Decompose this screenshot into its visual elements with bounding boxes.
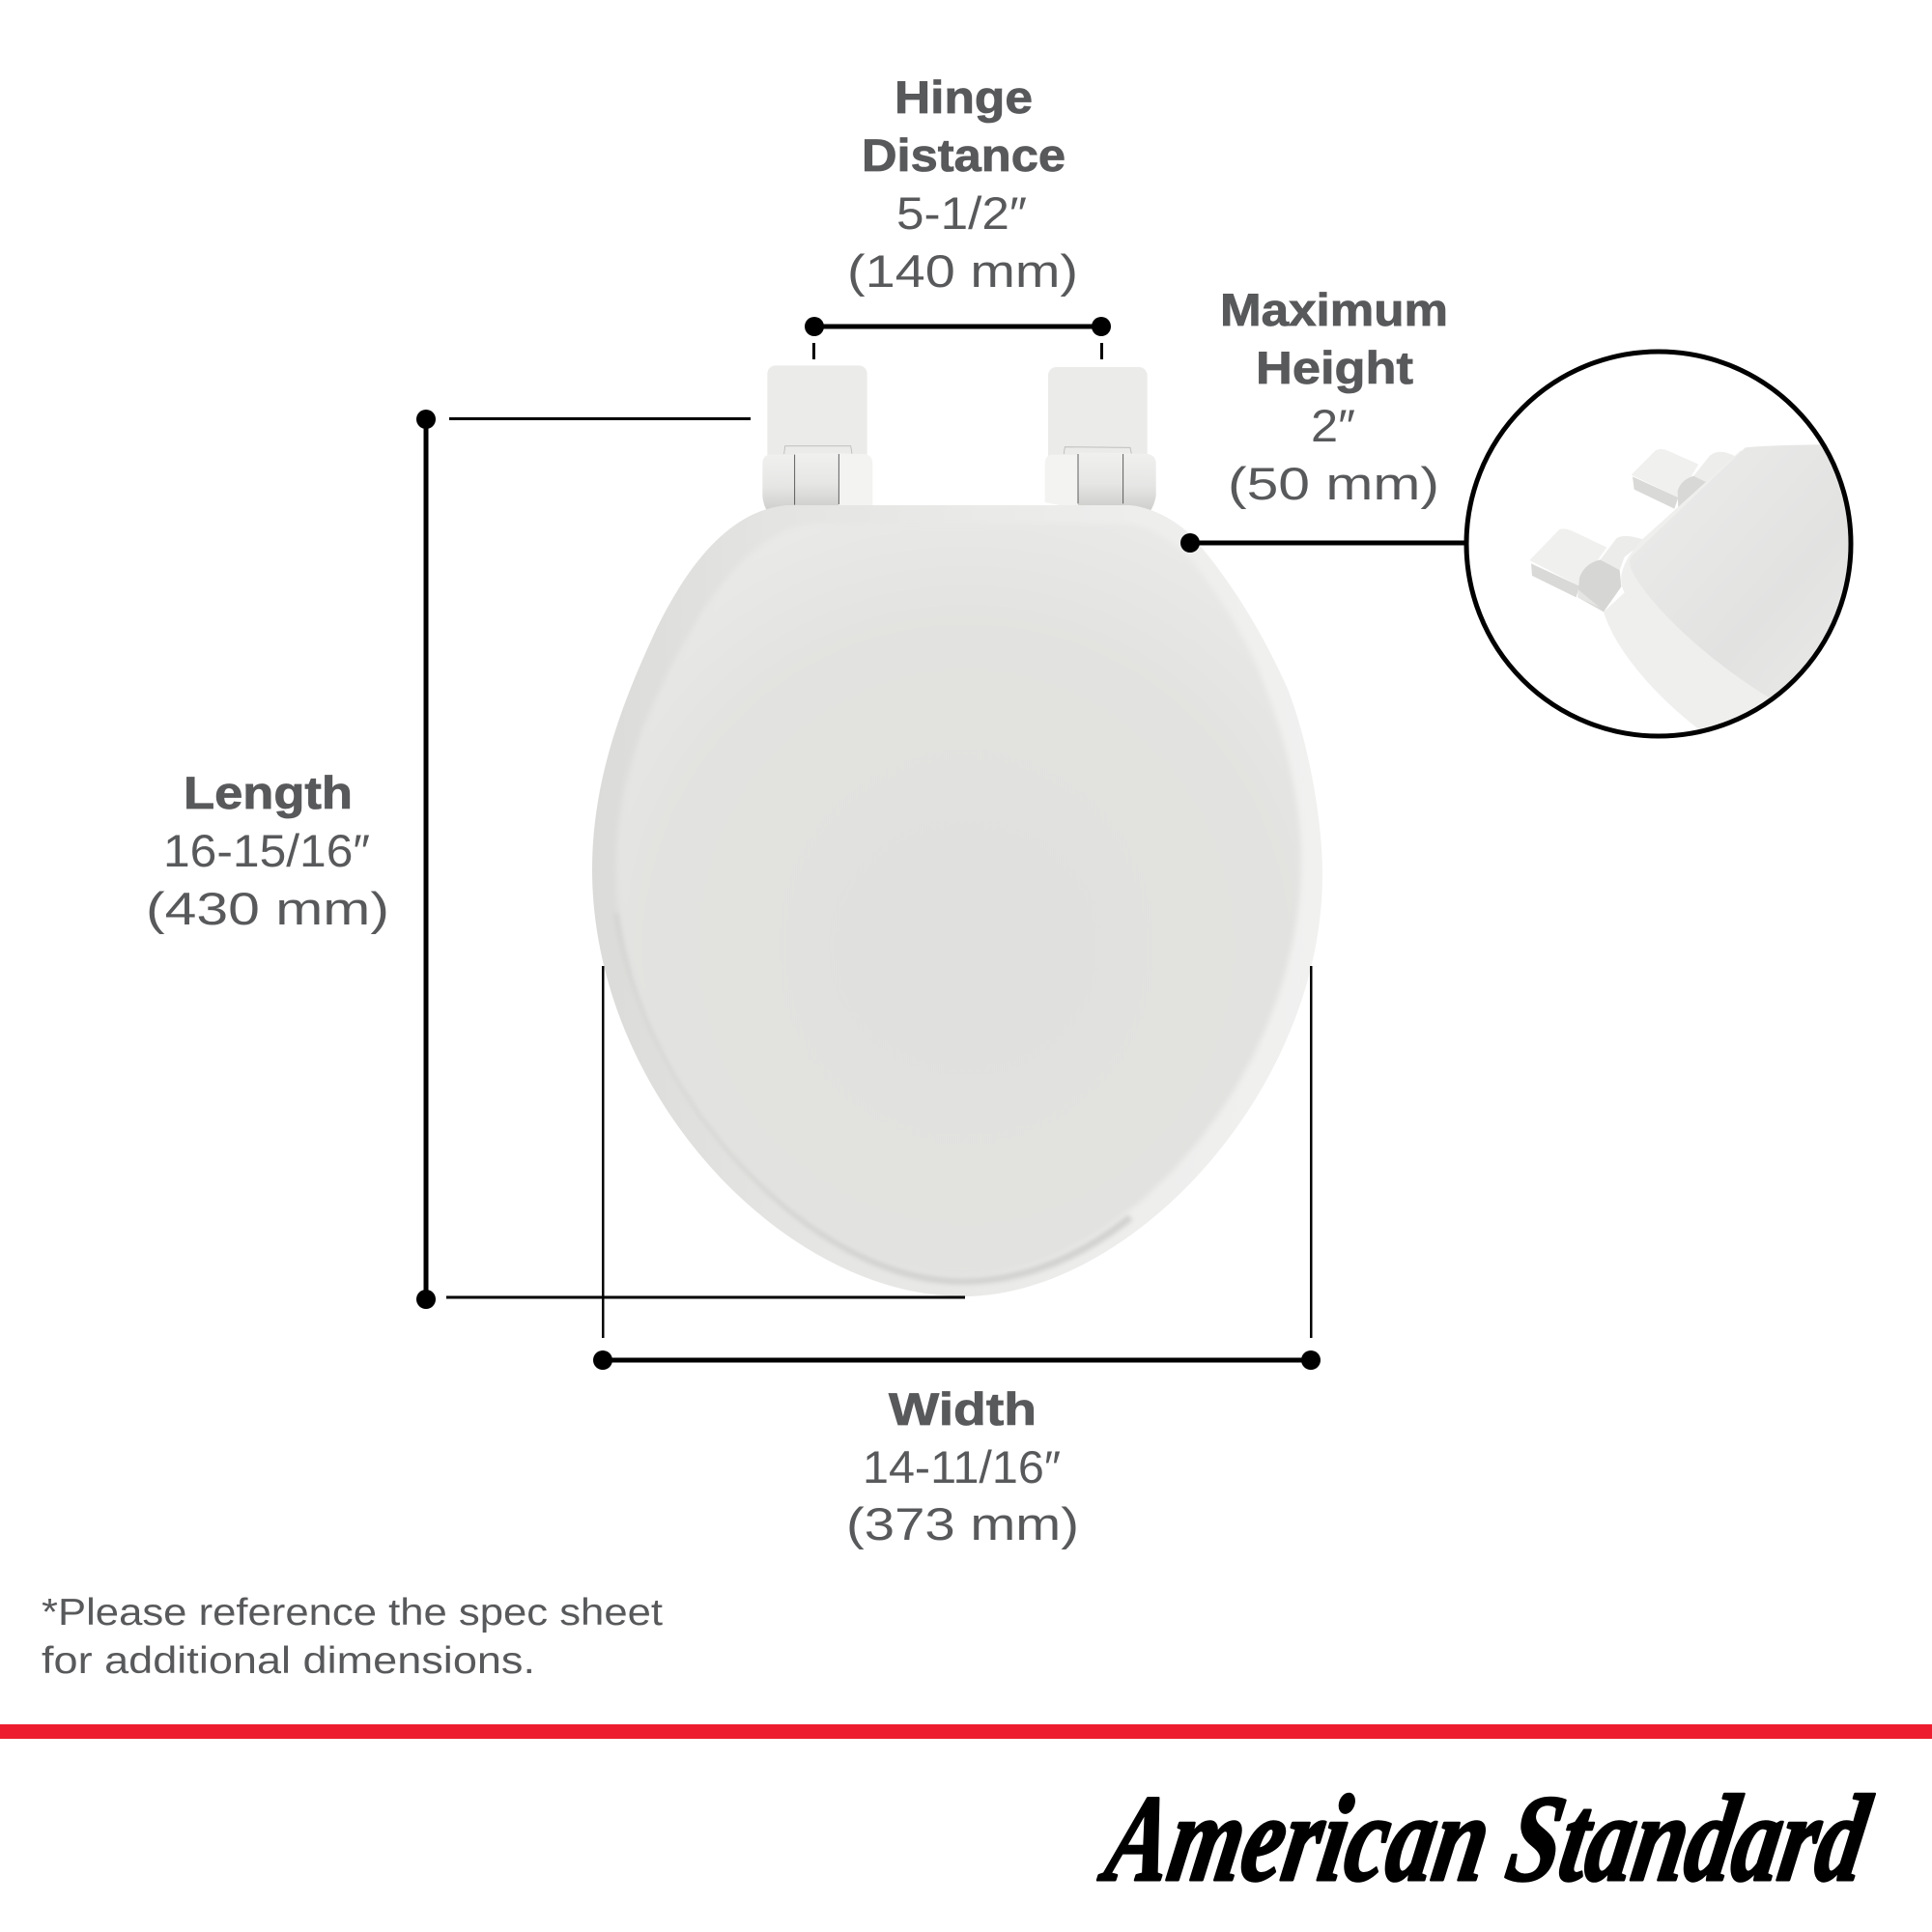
label: hinge distance: Hinge: [895, 71, 1033, 123]
label: width: Width: [889, 1383, 1037, 1435]
label: maximum height: Maximum: [1220, 284, 1448, 335]
label: hinge distance: 5-1/2″: [896, 187, 1027, 239]
width dimension line: [593, 966, 1321, 1370]
label: length: 16-15/16″: [163, 825, 370, 876]
footnote: for additional dimensions.: [42, 1640, 535, 1682]
hinge right: [1045, 367, 1156, 512]
rear hinge plate: [1632, 449, 1736, 509]
hinge distance dimension line: [805, 317, 1111, 359]
footnote: *Please reference the spec sheet: [42, 1592, 663, 1634]
logo: American Standard: American: [1093, 1770, 1500, 1907]
lid face: [1651, 444, 1849, 697]
label: hinge distance: (140 mm): [847, 245, 1078, 297]
seat rim: [592, 505, 1322, 1296]
label: length: (430 mm): [146, 883, 389, 934]
label: width: 14-11/16″: [863, 1441, 1061, 1492]
label: maximum height: 2″: [1311, 400, 1355, 451]
inset circle outline: [1466, 352, 1851, 736]
inset image content: [1529, 441, 1867, 734]
label: maximum height: Height: [1256, 342, 1413, 393]
label: length: Length: [184, 767, 353, 818]
label: hinge distance: Distance: [862, 129, 1065, 181]
red divider bar: [0, 1724, 1932, 1739]
label: width: [846, 1383, 1079, 1549]
label: maximum height: (50 mm): [1228, 458, 1439, 509]
front hinge plate: [1529, 528, 1645, 611]
length dimension line: [416, 410, 965, 1309]
lower rim: [1604, 593, 1756, 729]
label: hinge distance: [847, 71, 1078, 297]
logo: American Standard: [1093, 1770, 1880, 1907]
seat lid face: [616, 524, 1301, 1277]
label: width: (373 mm): [846, 1498, 1079, 1549]
hinge left: [762, 365, 872, 512]
toilet seat: [592, 505, 1322, 1296]
inset: side view of hinge: [1466, 352, 1867, 736]
maximum height connector: [1180, 533, 1468, 553]
seat lid groove shadow: [738, 1163, 1132, 1286]
footnote: [42, 1592, 663, 1682]
label: maximum height: [1220, 284, 1448, 509]
lid edge: [1621, 450, 1742, 593]
label: length: [146, 767, 389, 934]
